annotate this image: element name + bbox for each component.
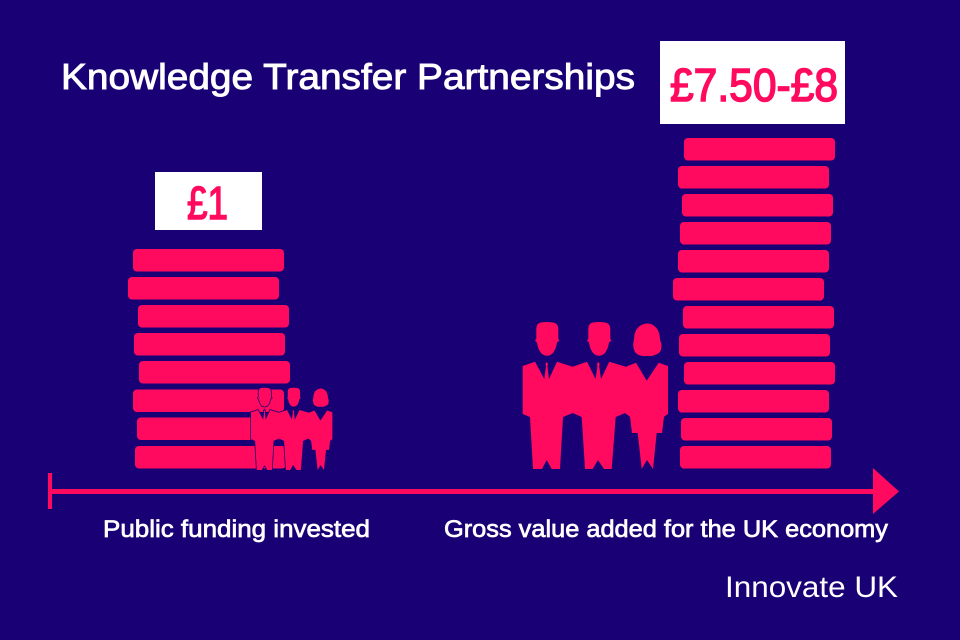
value box: £7.50-£8 <box>660 41 845 124</box>
title: Knowledge Transfer Partnerships <box>61 56 635 97</box>
coin stack: gross value added <box>673 138 835 468</box>
icon: large group of people <box>523 322 668 469</box>
value box: £1 <box>155 172 262 230</box>
arrow axis <box>48 468 899 514</box>
coin stack: public funding <box>128 249 290 468</box>
logo: Innovate UK: Innovate UK <box>725 571 898 604</box>
value box: £7.50-£8: £7.50-£8 <box>670 59 838 111</box>
value box: £1: £1 <box>187 177 228 229</box>
label: public funding: Public funding invested <box>103 516 370 543</box>
label: gross value added: Gross value added for the UK economy <box>444 516 888 543</box>
icon: small group of people <box>251 388 332 470</box>
